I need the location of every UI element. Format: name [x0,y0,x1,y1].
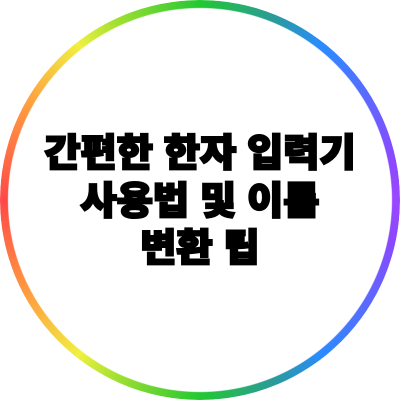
title: 간편한 한자 입력기 [44,133,356,175]
title [44,132,356,270]
title: 변환 팁 [140,228,260,270]
title: 사용법 및 이름 [81,180,319,222]
